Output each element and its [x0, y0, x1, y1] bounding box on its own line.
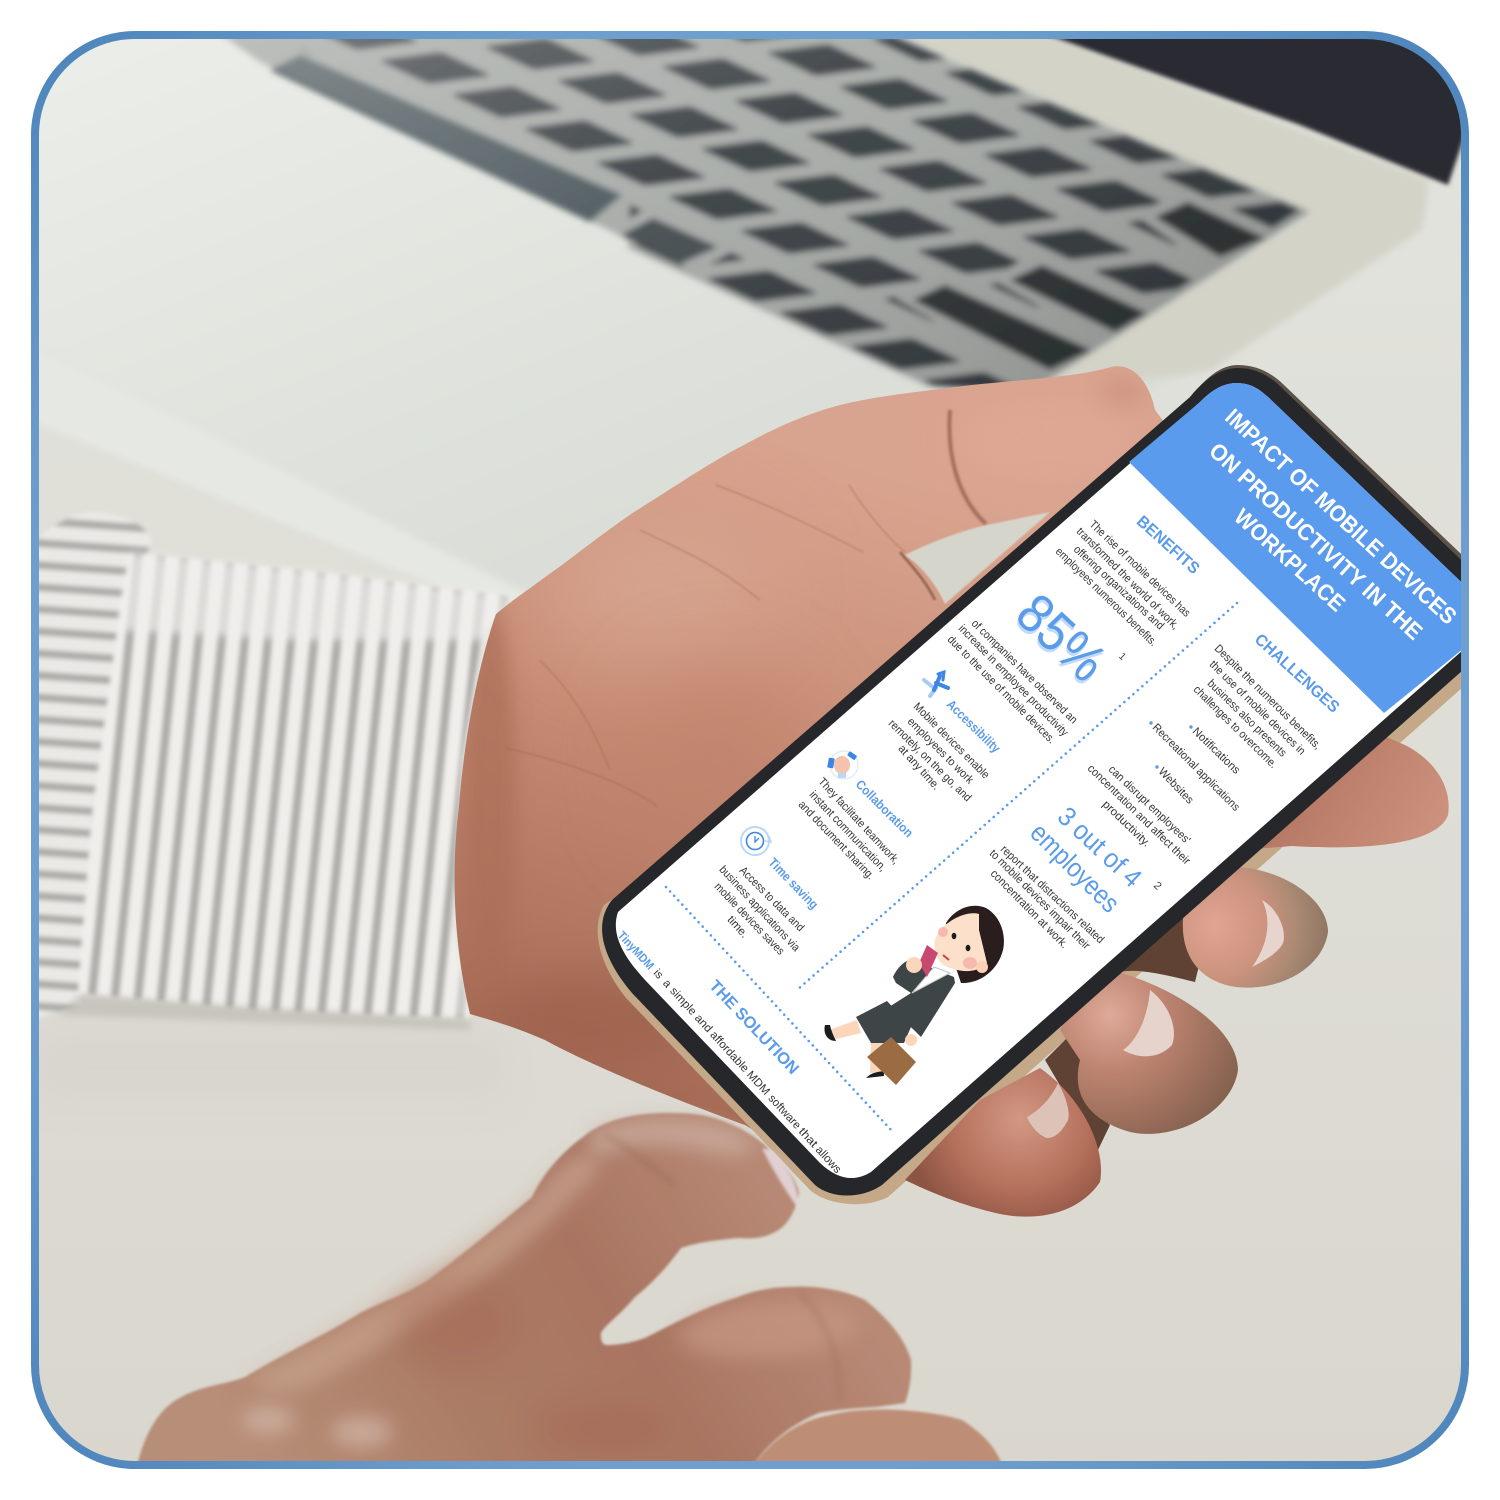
collaboration text: They facilitate teamwork, [816, 776, 901, 867]
keyboard well [224, 39, 1309, 310]
phone in hand [919, 945, 938, 977]
challenges intro: challenges to overcome. [1191, 684, 1279, 771]
eyes [952, 933, 970, 951]
upper side highlight [250, 1155, 600, 1392]
hair [946, 906, 1004, 983]
finger shadow: between fingers two and three [1123, 918, 1198, 982]
wide key wells [625, 200, 1236, 378]
benefits intro: employees numerous benefits. [1053, 546, 1159, 649]
time saving text: business applications via [717, 864, 802, 954]
solution heading: THE SOLUTION [705, 977, 802, 1078]
mouth [943, 955, 949, 960]
challenges bullets: Notifications [1190, 726, 1242, 777]
finger two [1183, 867, 1328, 988]
second finger crease [800, 1292, 840, 1400]
third finger [750, 1410, 1004, 1470]
title: ON PRODUCTIVITY IN THE [1204, 437, 1428, 645]
cuff with vertical stripes [78, 553, 513, 1018]
front leg [870, 1043, 890, 1073]
pointing hand [136, 1113, 1004, 1470]
disruption text: concentration and affect their [1085, 763, 1192, 867]
challenges heading: CHALLENGES [1251, 630, 1343, 716]
fingers behind phone [905, 730, 1449, 1217]
time saving text: time. [725, 914, 750, 941]
distraction text: concentration at work. [988, 868, 1070, 951]
time saving text: mobile devices saves [712, 881, 786, 958]
skirt [856, 1001, 911, 1043]
solution text: simple [667, 985, 698, 1018]
solution text: that [796, 1126, 820, 1151]
front shoe [866, 1071, 884, 1078]
bag [867, 1037, 916, 1085]
challenges intro: Despite the numerous benefits, [1212, 643, 1323, 752]
85% description: of companies have observed an [969, 618, 1079, 726]
cuff top fade [118, 553, 513, 640]
sleeve arm with horizontal stripes [30, 512, 152, 1020]
nail four [1027, 1083, 1069, 1138]
fingertip nail glow [762, 1148, 798, 1208]
85% statistic: 85% [1005, 581, 1119, 694]
palm creases [505, 485, 905, 806]
title: WORKPLACE [1229, 503, 1351, 617]
distraction text: report that distractions related [998, 844, 1106, 946]
solution text: software [766, 1093, 803, 1132]
laptop screen [1049, 39, 1461, 188]
solution text [615, 928, 844, 1177]
disruption text: can disrupt employees' [1106, 764, 1192, 847]
second finger highlight [678, 1296, 862, 1364]
phone metal rim [598, 630, 1480, 1204]
phone screen [615, 383, 1480, 1178]
solution text: TinyMDM [615, 928, 657, 972]
table shadow band [39, 355, 522, 600]
finger four [905, 1068, 1101, 1217]
3 out of 4 employees statistic: employees [1024, 817, 1126, 919]
accessibility text: remotely, on the go, and [886, 718, 973, 804]
finger three [1060, 972, 1238, 1134]
cuff hem fade [453, 640, 487, 1017]
title: IMPACT OF MOBILE DEVICES [1220, 403, 1462, 629]
challenges intro: business also presents [1205, 678, 1289, 760]
benefits intro: The rise of mobile devices has [1087, 519, 1192, 620]
distraction text: to mobile devices impair their [987, 848, 1092, 952]
top edge highlight [590, 1118, 753, 1160]
cheeks [938, 927, 977, 969]
85% description: increase in employee productivity [956, 623, 1070, 739]
icon: clock [741, 827, 771, 855]
solution text: allows [813, 1144, 843, 1176]
dotted divider: columns [797, 603, 1237, 990]
laptop [39, 39, 1461, 390]
benefits intro: transformed the world of work, [1074, 526, 1181, 632]
85% statistic: 85% [1004, 584, 1118, 697]
85% description: due to the use of mobile devices. [945, 634, 1057, 746]
solution text: affordable [707, 1029, 751, 1075]
solution text: MDM [744, 1069, 772, 1098]
laptop body [39, 39, 336, 314]
pale knuckle spots [242, 1406, 392, 1448]
finger shadow: between fingers three and four [1045, 1039, 1110, 1150]
challenges bullets: Recreational applications [1150, 722, 1242, 814]
palm shading [464, 377, 1145, 1065]
collaboration text: and document sharing. [796, 799, 876, 882]
knuckle redness [395, 1280, 515, 1370]
space bar [270, 55, 622, 222]
challenges intro: the use of mobile devices in [1207, 659, 1307, 758]
ear [976, 961, 988, 973]
keyboard [215, 30, 1310, 395]
collaboration text: instant communication, [807, 789, 888, 874]
benefits intro: offering organizations and [1071, 544, 1166, 632]
thumb crease [949, 410, 986, 524]
solution text: a [660, 978, 674, 991]
accessibility text: at any time. [896, 743, 942, 793]
keyboard light falloff [215, 30, 1310, 395]
table shadow near sleeve [30, 1030, 510, 1100]
challenges bullets: Websites [1156, 766, 1196, 807]
3 out of 4 employees statistic: 3 out of 4 [1052, 801, 1148, 893]
laptop silver right edge [904, 39, 1428, 379]
bottom redness [530, 1400, 670, 1460]
blue header band [1129, 383, 1480, 713]
time saving heading: Time saving [766, 855, 822, 912]
footnote 2: 2 [1151, 880, 1164, 893]
accessibility heading: Accessibility [944, 697, 1004, 756]
disruption text: productivity. [1100, 799, 1152, 849]
collaboration heading: Collaboration [853, 777, 916, 840]
illustration: businesswoman with phone [824, 906, 1004, 1085]
nail three [1123, 990, 1174, 1056]
solution text: and [692, 1012, 714, 1035]
accessibility text: employees to work [905, 716, 976, 787]
time saving text: Access to data and [737, 865, 806, 934]
hand silhouette [136, 1113, 911, 1470]
tip crease [605, 1135, 675, 1185]
key grid [300, 30, 1300, 392]
web shadow [900, 552, 935, 600]
finger one [1262, 738, 1449, 848]
dotted divider: solution [666, 887, 893, 1132]
back leg [829, 1020, 861, 1040]
phone black bezel [602, 368, 1480, 1196]
jacket [889, 960, 955, 1037]
benefits heading: BENEFITS [1133, 512, 1203, 578]
shirt [912, 967, 950, 993]
footnote 1: 1 [1116, 651, 1128, 663]
back shoe [824, 1025, 836, 1041]
icon: accessibility arrows [924, 672, 948, 696]
icon: collaboration handshake [827, 751, 858, 779]
phone top rim [1200, 365, 1461, 560]
gap between thumb and phone [905, 512, 1050, 604]
holding hand palm [454, 366, 1163, 1130]
lower hand [905, 1034, 917, 1046]
hand [906, 957, 922, 973]
face [934, 913, 987, 971]
cuff shadow on table [60, 995, 470, 1030]
accessibility text: Mobile devices enable [911, 701, 991, 781]
nail two [1252, 900, 1284, 967]
screen white background [616, 383, 1480, 1178]
shirt sleeve [30, 512, 513, 1020]
solution text: is [651, 967, 665, 982]
palm base [454, 366, 1163, 1130]
wide keys [621, 202, 1265, 370]
